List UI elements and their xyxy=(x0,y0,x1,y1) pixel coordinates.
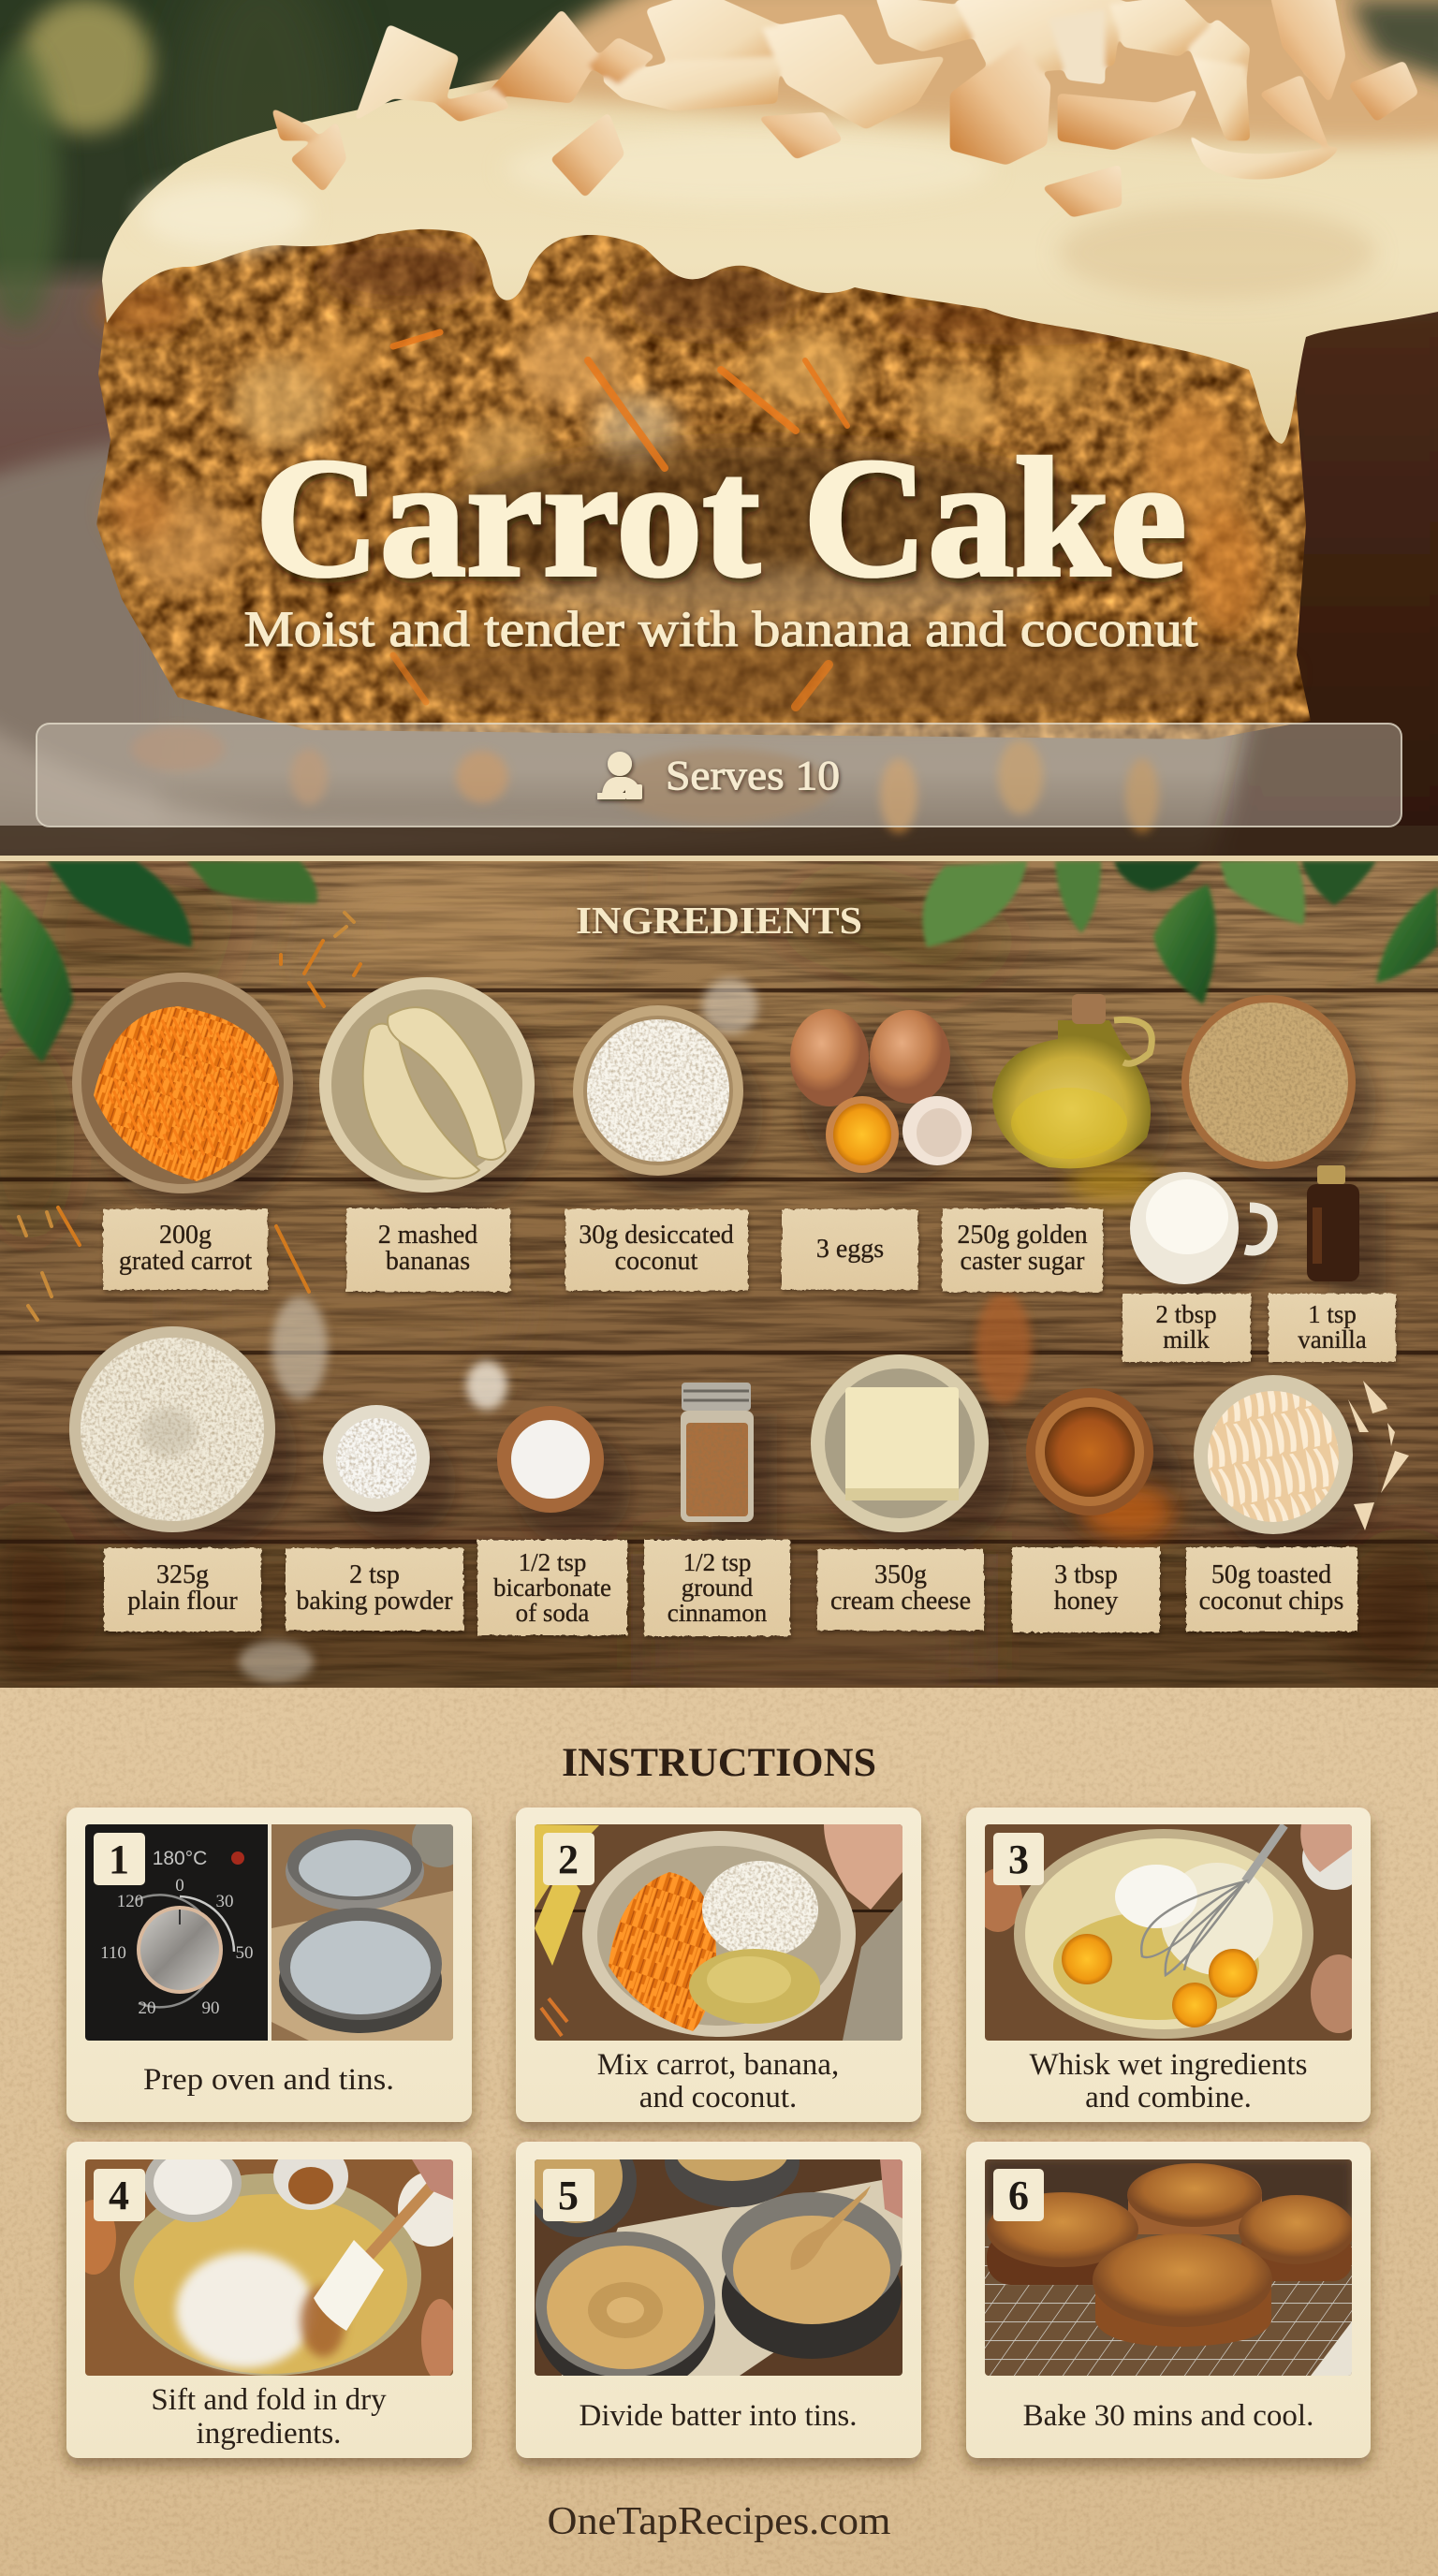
label: 200g grated carrot xyxy=(103,1209,268,1290)
toasted flake bed xyxy=(468,0,1438,143)
label: 2 mashed bananas xyxy=(346,1208,510,1292)
ingredient: ground cinnamon jar xyxy=(681,1383,754,1522)
badge 5: 5 xyxy=(558,2173,579,2218)
label: 1 tsp vanilla: vanilla xyxy=(1298,1325,1367,1354)
badge 6 xyxy=(993,2169,1044,2221)
label: 1/2 tsp ground cinnamon: ground xyxy=(682,1573,754,1602)
ingredient: vanilla bottle xyxy=(1307,1165,1359,1281)
step 4 caption: ingredients. xyxy=(197,2417,341,2451)
label: 2 tbsp milk xyxy=(1123,1294,1251,1362)
step 2 caption: and coconut. xyxy=(639,2081,797,2115)
label: 1/2 tsp bicarbonate of soda xyxy=(477,1540,627,1635)
badge 6: 6 xyxy=(1008,2173,1029,2218)
label: 250g golden caster sugar: caster sugar xyxy=(961,1247,1085,1276)
ingredient: oil jug xyxy=(992,994,1161,1204)
oven temperature text: 20 xyxy=(139,1998,155,2018)
badge 5 xyxy=(543,2169,594,2221)
label: 3 tbsp honey: honey xyxy=(1054,1587,1118,1616)
step 5 image: divide batter xyxy=(524,2117,902,2396)
badge 2 xyxy=(543,1833,594,1885)
label: 250g golden caster sugar: 250g golden xyxy=(957,1221,1088,1250)
label: 3 tbsp honey xyxy=(1012,1547,1160,1632)
label: 250g golden caster sugar xyxy=(942,1208,1103,1292)
step 2 image: mixing bowl xyxy=(535,1824,902,2041)
label: 2 tbsp milk: 2 tbsp xyxy=(1155,1300,1217,1328)
panel: ingredients on wood xyxy=(0,861,1438,1694)
label: 2 tsp baking powder: baking powder xyxy=(296,1587,453,1616)
whisk xyxy=(1141,1825,1284,1975)
label: 325g plain flour: plain flour xyxy=(127,1587,238,1616)
label: 50g toasted coconut chips: 50g toasted xyxy=(1211,1560,1331,1589)
serves bar xyxy=(37,724,1401,827)
divider band xyxy=(0,856,1438,861)
badge 3: 3 xyxy=(1008,1837,1029,1882)
paper background xyxy=(0,1688,1438,2576)
ingredient: desiccated coconut bowl xyxy=(573,1005,743,1176)
oven temperature text xyxy=(100,1848,253,2018)
ingredient: grated carrot bowl xyxy=(72,973,293,1193)
label: 1 tsp vanilla xyxy=(1269,1294,1396,1362)
cake crumb xyxy=(96,215,1311,739)
step 3 caption: and combine. xyxy=(1085,2081,1252,2115)
ingredient: eggs xyxy=(790,1009,972,1173)
plate xyxy=(0,437,110,539)
step 1 caption: Prep oven and tins. xyxy=(143,2063,394,2097)
oven temperature text: 180°C xyxy=(153,1848,207,1869)
label: 200g grated carrot: 200g xyxy=(159,1221,212,1250)
cake crust right xyxy=(1208,300,1438,871)
ingredient: honey bowl xyxy=(1026,1388,1175,1540)
footer: website: OneTapRecipes.com xyxy=(547,2500,891,2543)
card: step 4 xyxy=(66,2142,472,2458)
oven temperature text: 110 xyxy=(100,1943,126,1963)
badge 1 xyxy=(94,1833,145,1885)
label: 350g cream cheese: cream cheese xyxy=(830,1587,971,1616)
oven temperature text: 50 xyxy=(236,1943,253,1963)
label: 1/2 tsp ground cinnamon: 1/2 tsp xyxy=(683,1548,751,1576)
bottom darkening xyxy=(0,826,1438,856)
hero background xyxy=(0,0,1438,856)
oven temperature text: 120 xyxy=(117,1892,143,1911)
serves text: Serves 10 xyxy=(666,753,840,798)
icon: person xyxy=(597,752,642,799)
step 3 image: whisking xyxy=(974,1824,1367,2041)
step 6 caption: Bake 30 mins and cool. xyxy=(1023,2399,1313,2433)
card: step 2 xyxy=(516,1808,921,2122)
step 4 caption: Sift and fold in dry xyxy=(151,2383,387,2417)
card: step 3 xyxy=(966,1808,1371,2122)
label: 325g plain flour: 325g xyxy=(156,1560,209,1589)
ingredient: plain flour bowl xyxy=(69,1326,275,1532)
label: 200g grated carrot: grated carrot xyxy=(119,1247,252,1276)
label: 3 eggs xyxy=(782,1209,918,1290)
oven temperature text: 90 xyxy=(202,1998,219,2018)
leaves xyxy=(0,861,1438,1062)
card: step 1 xyxy=(66,1808,472,2122)
plank gaps xyxy=(0,990,1438,1542)
sun and shadow patches xyxy=(0,861,1438,1694)
label: 2 tsp baking powder: 2 tsp xyxy=(349,1560,400,1589)
title: Carrot Cake xyxy=(255,424,1187,612)
step 4 image: sift and fold xyxy=(71,2143,463,2381)
blurred plate crumbs behind bar xyxy=(131,726,1159,833)
label: 2 mashed bananas: 2 mashed xyxy=(378,1221,477,1250)
card: step 6 xyxy=(966,2142,1371,2458)
label: 2 tbsp milk: milk xyxy=(1163,1325,1210,1354)
carrot flecks in crumb xyxy=(393,332,847,707)
label: 1/2 tsp bicarbonate of soda: of soda xyxy=(516,1599,589,1627)
wood table xyxy=(0,861,1438,1688)
label: 30g desiccated coconut: coconut xyxy=(615,1247,698,1276)
label: 1/2 tsp bicarbonate of soda: bicarbonate xyxy=(493,1573,611,1602)
label: 2 tsp baking powder xyxy=(286,1548,463,1631)
crumb light patches xyxy=(94,281,1264,637)
ingredient: milk jug xyxy=(1130,1172,1272,1284)
label: 1/2 tsp ground cinnamon: cinnamon xyxy=(668,1599,768,1627)
cast shadows xyxy=(87,1004,1386,1559)
label: 30g desiccated coconut: 30g desiccated xyxy=(579,1221,734,1250)
label: 1/2 tsp bicarbonate of soda: 1/2 tsp xyxy=(519,1548,586,1576)
frosting xyxy=(102,37,1438,444)
panel: instructions on paper xyxy=(0,1688,1438,2576)
oven temperature text: 30 xyxy=(215,1892,234,1911)
badge 1: 1 xyxy=(109,1837,129,1882)
coconut flakes xyxy=(271,0,1418,217)
bokeh light xyxy=(19,0,154,133)
label: 325g plain flour xyxy=(104,1548,261,1632)
step 6 image: baked cakes on rack xyxy=(985,2159,1355,2376)
panel: hero photo of carrot cake xyxy=(0,0,1438,871)
ingredient: golden caster sugar bowl xyxy=(1181,995,1356,1169)
label: 3 tbsp honey: 3 tbsp xyxy=(1054,1560,1118,1589)
label: 2 mashed bananas: bananas xyxy=(386,1247,470,1276)
label: 50g toasted coconut chips xyxy=(1186,1547,1357,1632)
label: 1 tsp vanilla: 1 tsp xyxy=(1308,1300,1357,1328)
label: 3 eggs: 3 eggs xyxy=(816,1235,884,1264)
badge 4 xyxy=(94,2169,145,2221)
label: 50g toasted coconut chips: coconut chips xyxy=(1199,1587,1343,1616)
badge 3 xyxy=(993,1833,1044,1885)
step 2 caption: Mix carrot, banana, xyxy=(597,2048,839,2082)
step 1 image: oven dial and tins xyxy=(85,1811,468,2041)
badge 2: 2 xyxy=(558,1837,579,1882)
ingredient: toasted coconut chips bowl xyxy=(1194,1375,1409,1534)
subtitle: Moist and tender with banana and coconut xyxy=(243,601,1198,657)
ingredient: cream cheese plate xyxy=(811,1354,989,1532)
oven dial xyxy=(137,1906,223,1994)
step 3 caption: Whisk wet ingredients xyxy=(1030,2048,1307,2082)
label: 350g cream cheese xyxy=(817,1549,984,1631)
spilled carrot and spice xyxy=(19,913,360,1320)
ingredient: baking powder bowl xyxy=(323,1405,430,1512)
label: 350g cream cheese: 350g xyxy=(874,1560,927,1589)
badge 4: 4 xyxy=(109,2173,129,2218)
crumb dark pockets xyxy=(318,240,1292,721)
heading: instructions: INSTRUCTIONS xyxy=(562,1741,876,1785)
card: step 5 xyxy=(516,2117,921,2458)
label: 30g desiccated coconut xyxy=(565,1209,748,1291)
oven temperature text: 0 xyxy=(175,1876,184,1895)
ingredient: bicarbonate of soda bowl xyxy=(497,1406,604,1513)
step 5 caption: Divide batter into tins. xyxy=(580,2399,857,2433)
ingredient: mashed bananas bowl xyxy=(319,977,535,1193)
heading: ingredients: INGREDIENTS xyxy=(576,899,862,942)
label: 1/2 tsp ground cinnamon xyxy=(644,1540,790,1636)
